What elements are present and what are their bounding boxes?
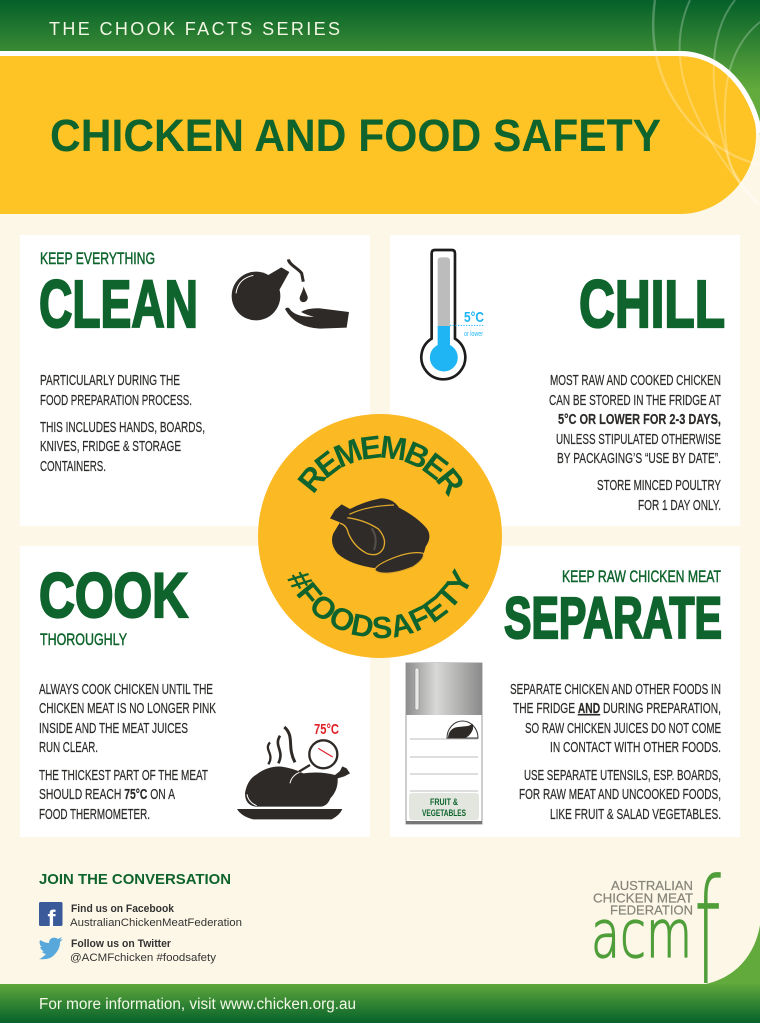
cook subheading: THOROUGHLY [40, 631, 127, 649]
panel: clean [20, 235, 370, 526]
bottom right green curve [700, 925, 760, 985]
shelf label: FRUIT & [430, 797, 458, 808]
chill text: FOR 1 DAY ONLY. [638, 498, 721, 514]
logo name: FEDERATION [610, 904, 693, 918]
temperature label: or lower [464, 329, 483, 338]
clean text: THIS INCLUDES HANDS, BOARDS, [40, 420, 205, 436]
separate text [510, 682, 721, 823]
logo letters: acm [591, 896, 692, 973]
clean text: CONTAINERS. [40, 459, 106, 475]
logo name [593, 879, 693, 918]
icon: facebook: f [48, 906, 56, 933]
decorative arcs [653, 0, 760, 205]
facebook text: Find us on Facebook [71, 903, 175, 915]
facebook text [70, 903, 242, 929]
mini chicken [447, 721, 478, 738]
icon: thermometer [421, 250, 484, 379]
chill text [549, 373, 721, 514]
icon: chicken [330, 498, 429, 573]
shelf label: VEGETABLES [422, 808, 466, 819]
panel: chill [390, 235, 740, 526]
icon: twitter [39, 937, 63, 959]
icon: facebook [39, 902, 62, 933]
title: CHICKEN AND FOOD SAFETY [50, 110, 661, 161]
twitter text: @ACMFchicken #foodsafety [70, 952, 217, 964]
shelf label [422, 797, 466, 819]
cook text: SHOULD REACH 75°C ON A [39, 787, 175, 803]
logo f: f [694, 848, 721, 1018]
cook heading: COOK [39, 561, 188, 631]
icon: spray bottle and hand [232, 259, 349, 329]
panel: separate [390, 546, 740, 837]
title band [0, 51, 760, 214]
logo name: CHICKEN MEAT [593, 892, 693, 906]
badge text: foodsafety: #FOODSAFETY [287, 568, 470, 638]
footer text: For more information, visit www.chicken.org.au [39, 996, 356, 1013]
center badge [258, 414, 502, 658]
cook text: THE THICKEST PART OF THE MEAT [39, 768, 208, 784]
clean heading: CLEAN [39, 267, 198, 342]
icon: fridge [406, 663, 482, 824]
cook text: ALWAYS COOK CHICKEN UNTIL THE [39, 682, 213, 698]
twitter text: Follow us on Twitter [71, 938, 172, 950]
top green banner [0, 0, 760, 140]
badge text: remember: REMEMBER [297, 436, 462, 497]
facebook text: AustralianChickenMeatFederation [70, 917, 242, 929]
logo: acmf [591, 848, 721, 1018]
cook text [39, 682, 216, 823]
footer bar [0, 984, 760, 1023]
logo name: AUSTRALIAN [611, 879, 693, 893]
cook text: INSIDE AND THE MEAT JUICES [39, 721, 188, 737]
social heading: JOIN THE CONVERSATION [39, 871, 231, 888]
icon: roast chicken with thermometer [237, 727, 350, 819]
temperature label [464, 309, 484, 338]
series label: THE CHOOK FACTS SERIES [49, 19, 340, 39]
cook text: CHICKEN MEAT IS NO LONGER PINK [39, 701, 216, 717]
clean text: KNIVES, FRIDGE & STORAGE [40, 439, 181, 455]
temperature label: 75°C [314, 721, 339, 738]
clean text: FOOD PREPARATION PROCESS. [40, 393, 192, 409]
social section [39, 871, 242, 964]
cook text: FOOD THERMOMETER. [39, 807, 150, 823]
clean text [40, 373, 205, 475]
temperature label: 5°C [464, 309, 484, 326]
panel: cook [20, 546, 370, 837]
twitter text [70, 938, 217, 964]
clean text: PARTICULARLY DURING THE [40, 373, 180, 389]
clean subheading: KEEP EVERYTHING [40, 250, 155, 268]
cook text: RUN CLEAR. [39, 740, 98, 756]
